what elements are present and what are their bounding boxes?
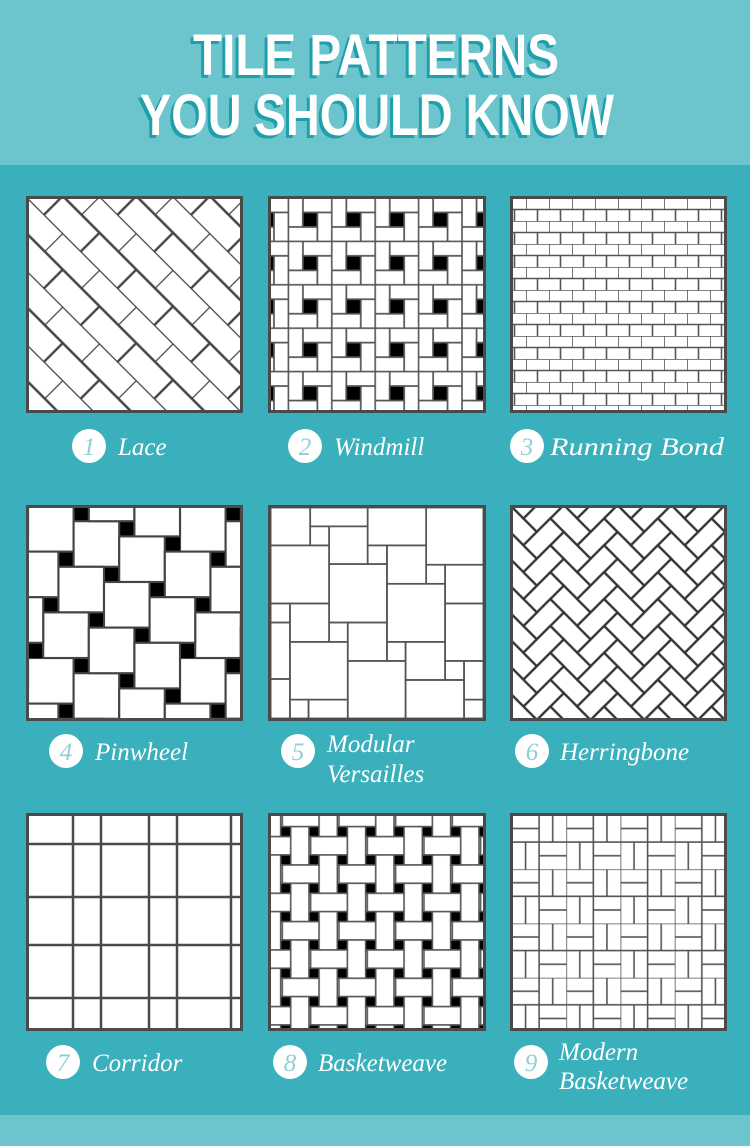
title: YOU SHOULD KNOW <box>137 86 611 151</box>
tile 9: modern basketweave <box>512 814 726 1030</box>
label 6 <box>515 734 689 768</box>
label 4: 4 <box>60 739 72 766</box>
label 9 <box>514 1039 688 1095</box>
label 9: Basketweave <box>559 1068 688 1095</box>
label 7: 7 <box>57 1050 71 1077</box>
tile 4: pinwheel <box>28 506 242 720</box>
title <box>137 23 614 151</box>
label 1 <box>72 429 167 463</box>
label 7 <box>46 1045 183 1079</box>
tile 7: corridor <box>27 814 242 1030</box>
label 4 <box>49 734 188 768</box>
label 6: 6 <box>526 739 539 766</box>
title: YOU SHOULD KNOW <box>140 83 614 148</box>
label 2 <box>288 429 424 463</box>
label 2: 2 <box>299 434 311 461</box>
label 4: Pinwheel <box>94 739 188 766</box>
tile 2: windmill <box>270 198 484 412</box>
label 8 <box>273 1045 447 1079</box>
tile 1: lace <box>28 198 242 412</box>
label 6: Herringbone <box>559 739 689 766</box>
label 3: Running Bond <box>549 434 725 461</box>
tile 6: herringbone <box>512 506 726 720</box>
label 1: 1 <box>83 434 95 461</box>
title: TILE PATTERNS <box>190 26 556 91</box>
label 5: Modular <box>326 731 415 758</box>
label 9: 9 <box>525 1050 538 1077</box>
title: TILE PATTERNS <box>193 23 559 88</box>
label 3: 3 <box>520 434 533 461</box>
label 8: 8 <box>284 1050 297 1077</box>
bottom band <box>0 1115 750 1146</box>
label 1: Lace <box>117 434 167 461</box>
label 9: Modern <box>558 1039 638 1066</box>
label 5 <box>281 731 424 788</box>
label 5: 5 <box>292 739 304 766</box>
tile 5: modular versailles <box>269 506 485 720</box>
label 3 <box>510 429 725 463</box>
label 8: Basketweave <box>318 1050 447 1077</box>
label 5: Versailles <box>327 761 424 788</box>
tile 3: running bond <box>512 198 726 412</box>
tile 8: basketweave <box>270 814 484 1030</box>
label 7: Corridor <box>92 1050 183 1077</box>
header band <box>0 0 750 165</box>
label 2: Windmill <box>334 434 424 461</box>
